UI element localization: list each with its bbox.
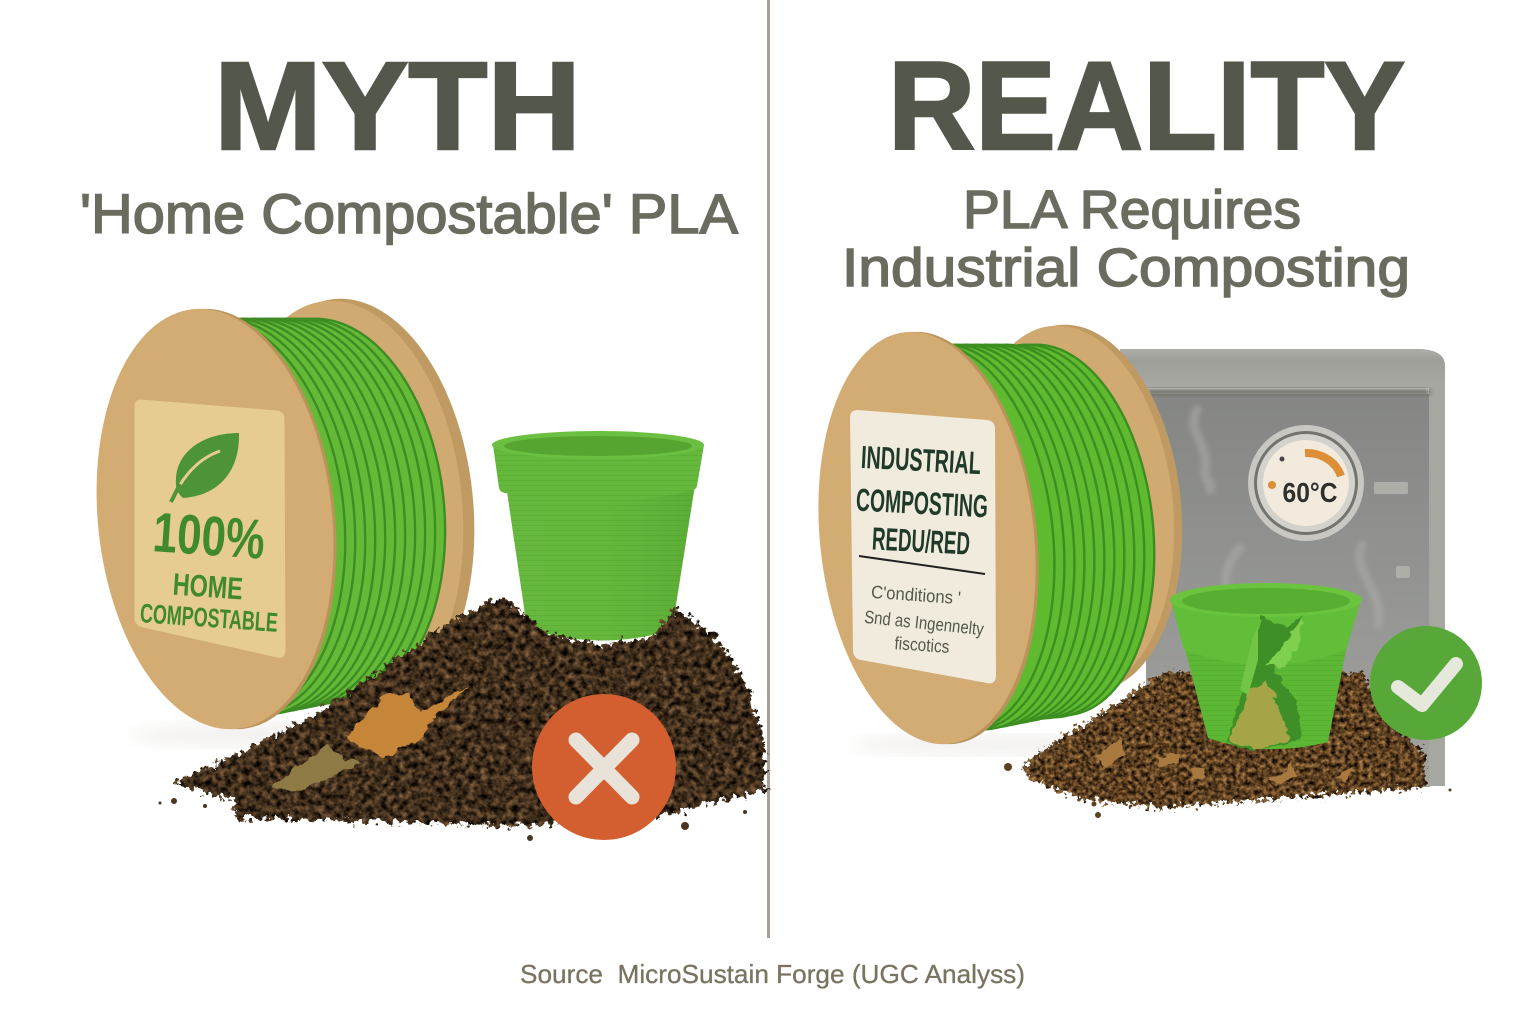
label small print: C'onditions ': [870, 582, 962, 608]
label text: 100% home compostable: HOME: [172, 567, 244, 606]
back spool flange: [209, 287, 494, 723]
badge: red cross: [532, 694, 676, 840]
label small print: Snd as Ingennelty: [863, 607, 985, 639]
ground shadow: [850, 735, 1150, 755]
product label: [850, 410, 996, 683]
panel: myth illustration: [77, 287, 764, 841]
divider: [767, 0, 770, 938]
badge: green check: [1370, 626, 1482, 740]
label text: industrial composting: INDUSTRIAL: [860, 439, 982, 481]
green filament coil: [92, 307, 463, 729]
label small print: [863, 582, 985, 657]
label text: 100% home compostable: 100%: [151, 500, 267, 571]
composter cabinet: [1120, 349, 1445, 787]
soil specks: [1004, 763, 1452, 818]
label text: industrial composting: COMPOSTING: [855, 482, 989, 524]
green filament coil: [827, 334, 1172, 742]
subheading: PLA requires industrial composting: PLA Requires: [963, 180, 1301, 240]
label text: 100% home compostable: [139, 500, 279, 638]
heading: REALITY: REALITY: [888, 37, 1405, 176]
soil pile: [172, 596, 764, 826]
soil clumps: [1095, 738, 1352, 784]
subheading: PLA requires industrial composting: [842, 180, 1410, 298]
steam wisps: [1194, 410, 1379, 625]
front spool flange: [77, 297, 356, 741]
label text: industrial composting: [855, 439, 989, 562]
soil bed: [1022, 672, 1425, 808]
subheading: home compostable PLA: 'Home Compostable' PLA: [80, 182, 739, 245]
heading: MYTH: MYTH: [214, 37, 581, 176]
back spool flange: [948, 314, 1200, 702]
product label: [134, 399, 286, 658]
icon: leaf: [171, 433, 239, 502]
label text: 100% home compostable: COMPOSTABLE: [139, 598, 279, 638]
label small print: fiscotics: [894, 633, 950, 657]
label text: industrial composting: REDU/RED: [871, 520, 971, 562]
orange organic scrap: [272, 686, 470, 792]
broken green pot: [1170, 583, 1362, 752]
intact green pot: [492, 431, 704, 641]
front spool flange: [799, 321, 1058, 755]
crack in pot: [1226, 614, 1304, 752]
gauge: 60°C: [1248, 425, 1364, 541]
panel: reality illustration: [799, 314, 1482, 818]
ground shadow: [130, 723, 470, 747]
source line: Source MicroSustain Forge (UGC Analyss): [520, 959, 1025, 989]
gauge: 60°C: 60°C: [1282, 477, 1338, 508]
subheading: PLA requires industrial composting: Industrial Composting: [842, 238, 1410, 298]
soil specks: [158, 798, 747, 841]
